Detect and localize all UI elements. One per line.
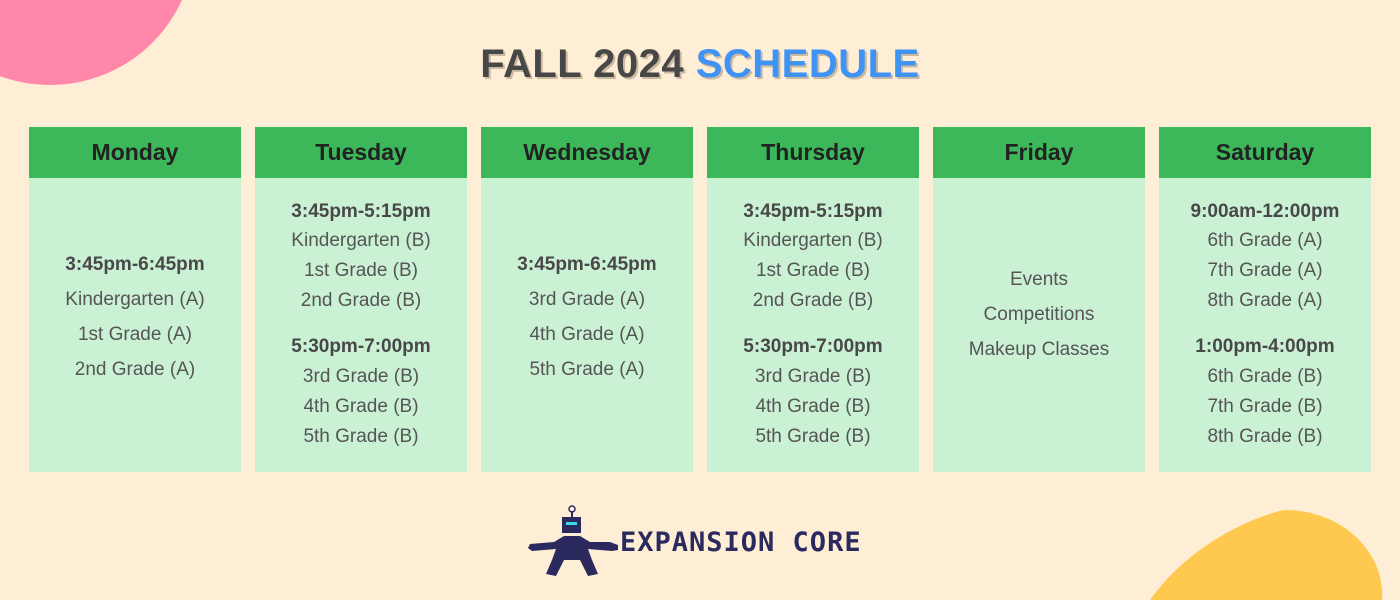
panel: Tuesday: 2nd Grade (B) xyxy=(301,290,421,311)
panel: Thursday: 2nd Grade (B) xyxy=(753,290,873,311)
panel: Monday xyxy=(29,127,241,472)
panel: Saturday: 9:00am-12:00pm xyxy=(1191,201,1339,222)
title: FALL 2024 SCHEDULE xyxy=(480,42,920,86)
panel: Tuesday: 3:45pm-5:15pm xyxy=(291,201,431,222)
panel: Monday: 1st Grade (A) xyxy=(78,324,192,345)
panel: Thursday: 3rd Grade (B) xyxy=(755,366,871,387)
panel: Wednesday: 4th Grade (A) xyxy=(529,324,645,345)
panel: Thursday xyxy=(707,127,919,472)
panel: Saturday: 1:00pm-4:00pm xyxy=(1195,336,1335,357)
text: EXPANSION CORE: EXPANSION CORE xyxy=(620,527,862,558)
panel: Saturday: 8th Grade (B) xyxy=(1207,426,1323,447)
panel: Friday: Competitions xyxy=(984,304,1094,325)
icon: robot xyxy=(528,505,618,576)
panel: Wednesday: 3rd Grade (A) xyxy=(529,289,645,310)
panel: Wednesday: 5th Grade (A) xyxy=(529,359,645,380)
panel: Saturday: 8th Grade (A) xyxy=(1207,290,1323,311)
panel: Thursday: 4th Grade (B) xyxy=(755,396,871,417)
panel: Monday: 2nd Grade (A) xyxy=(75,359,195,380)
panel: Tuesday: 3rd Grade (B) xyxy=(303,366,419,387)
panel: Monday: Kindergarten (A) xyxy=(65,289,205,310)
panel: Thursday: 5:30pm-7:00pm xyxy=(743,336,883,357)
panel: Tuesday: 5:30pm-7:00pm xyxy=(291,336,431,357)
panel: Wednesday xyxy=(481,127,693,472)
panel: Tuesday: 5th Grade (B) xyxy=(303,426,419,447)
panel: Tuesday: Tuesday xyxy=(315,139,407,165)
panel: Thursday: 1st Grade (B) xyxy=(756,260,870,281)
panel: Monday: 3:45pm-6:45pm xyxy=(65,254,205,275)
panel: Thursday: 3:45pm-5:15pm xyxy=(743,201,883,222)
panel: Wednesday: 3:45pm-6:45pm xyxy=(517,254,657,275)
panel: Tuesday: 1st Grade (B) xyxy=(304,260,418,281)
panel: Friday: Makeup Classes xyxy=(969,339,1109,360)
panel: Tuesday: Kindergarten (B) xyxy=(291,230,431,251)
panel: Saturday: 7th Grade (B) xyxy=(1207,396,1323,417)
panel: Saturday: 6th Grade (B) xyxy=(1207,366,1323,387)
panel: Friday: Friday xyxy=(1004,139,1074,165)
panel: Monday: Monday xyxy=(92,139,178,165)
logo: Expansion Core xyxy=(528,505,862,576)
panel: Saturday: 7th Grade (A) xyxy=(1207,260,1323,281)
panel: Tuesday: 4th Grade (B) xyxy=(303,396,419,417)
panel: Saturday: Saturday xyxy=(1216,139,1314,165)
decoration: pink circle xyxy=(0,0,182,85)
panel: Saturday xyxy=(1159,127,1371,472)
panel: Thursday: Kindergarten (B) xyxy=(743,230,883,251)
panel: Friday: Events xyxy=(1010,269,1068,290)
panel: Thursday: Thursday xyxy=(761,139,865,165)
panel: Wednesday: Wednesday xyxy=(523,139,651,165)
panel: Saturday: 6th Grade (A) xyxy=(1207,230,1323,251)
panel: Tuesday xyxy=(255,127,467,472)
decoration: yellow blob xyxy=(1150,510,1382,600)
panel: Friday xyxy=(933,127,1145,472)
panel: Thursday: 5th Grade (B) xyxy=(755,426,871,447)
